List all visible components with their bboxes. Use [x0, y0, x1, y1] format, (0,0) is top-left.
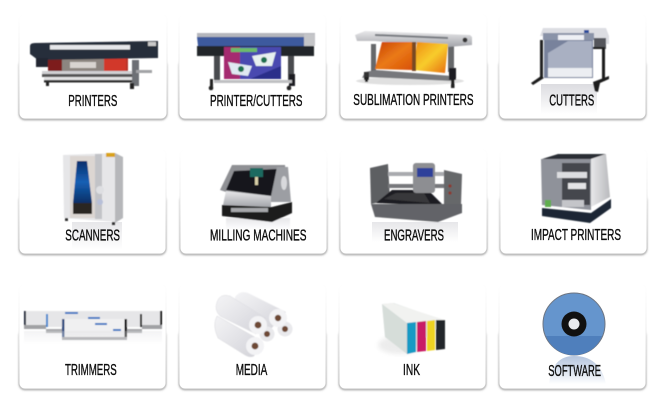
card: impact printers [500, 149, 647, 255]
image: 3D scanner [63, 153, 123, 250]
image: milling machine [220, 165, 292, 230]
image: engraver [370, 163, 462, 242]
label: printers: PRINTERS [68, 93, 117, 110]
label: impact printers: IMPACT PRINTERS [531, 227, 621, 244]
label: sublimation printers: SUBLIMATION PRINTERS [353, 92, 474, 109]
card: printers [19, 14, 167, 120]
card: engravers [340, 149, 487, 255]
image: trimmers [24, 311, 162, 345]
label: engravers: ENGRAVERS [384, 228, 444, 245]
label: scanners: SCANNERS [65, 228, 120, 245]
label: printer/cutters: PRINTER/CUTTERS [210, 93, 302, 110]
image: impact printer [541, 154, 611, 223]
image: wide format printer [30, 41, 158, 89]
image: vinyl cutter [531, 28, 609, 114]
image: printer cutter [197, 33, 315, 90]
image: ink cartridges [378, 303, 445, 354]
card: cutters [499, 14, 646, 120]
image: sublimation printer [355, 31, 472, 88]
image: software disc [543, 293, 606, 384]
label: trimmers: TRIMMERS [65, 362, 117, 379]
card: sublimation printers [340, 14, 487, 120]
card: trimmers [19, 284, 166, 390]
card: media [179, 284, 326, 390]
label: milling machines: MILLING MACHINES [210, 228, 306, 245]
card: software [499, 284, 646, 390]
label: media: MEDIA [236, 362, 268, 379]
image: media rolls [215, 292, 292, 357]
card: ink [339, 284, 486, 390]
card: scanners [19, 149, 166, 255]
label: ink: INK [403, 362, 420, 379]
label: software: SOFTWARE [548, 363, 601, 380]
card: milling machines [180, 149, 327, 255]
label: cutters: CUTTERS [549, 92, 594, 110]
card: printer/cutters [179, 14, 326, 120]
